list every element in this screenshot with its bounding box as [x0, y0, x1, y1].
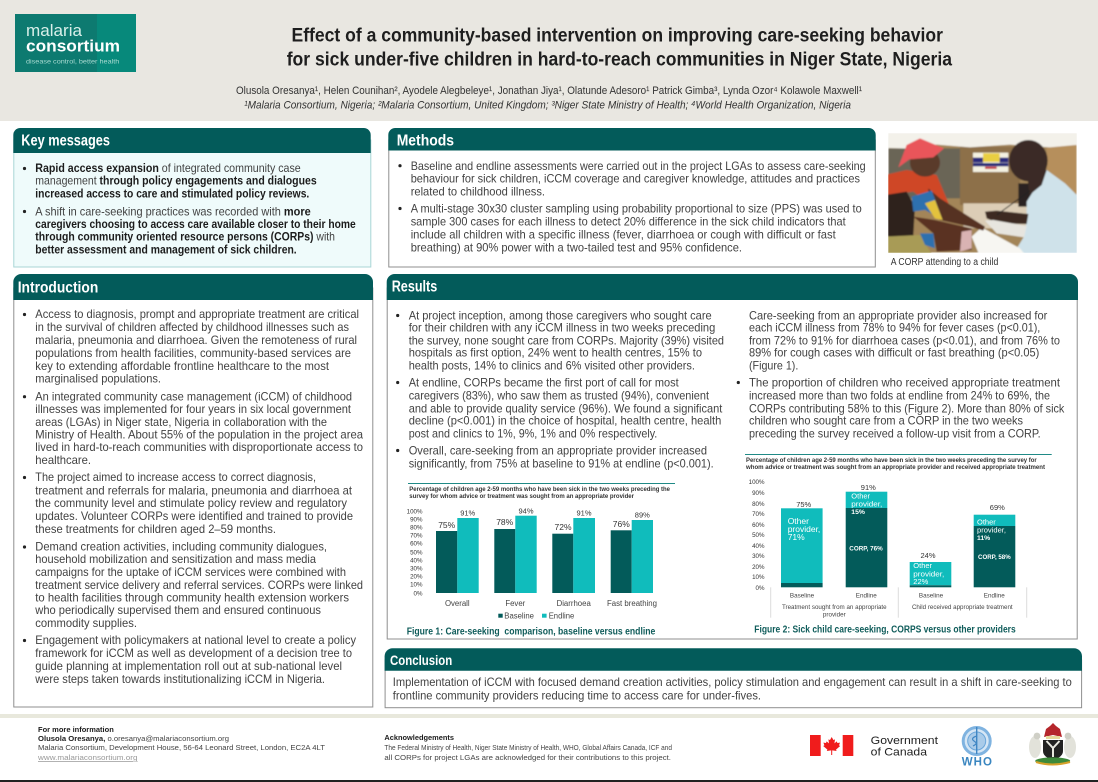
- introduction bullet 1: populations from health facilities, community-based services are: [35, 346, 351, 360]
- footer: contact information: [37, 725, 325, 762]
- introduction bullet 4: commodity supplies.: [35, 616, 137, 630]
- figure 2 category labels: Endline: [856, 592, 877, 599]
- results bullet 3 continued: (Figure 1).: [749, 358, 798, 372]
- figure 2 total labels: 75%: [796, 500, 812, 509]
- introduction bullet 1: [23, 307, 359, 386]
- figure 2 category labels: Child received appropriate treatment: [912, 604, 1013, 611]
- figure 2 segment labels: Other: [913, 561, 933, 570]
- figure 1 value labels: 94%: [518, 506, 534, 515]
- results bullet 1: At project inception, among those caregivers who sought care: [409, 308, 712, 322]
- key message 2: better assessment and management of sick children.: [35, 242, 297, 256]
- introduction bullet 2: lived in hard-to-reach communities with disproportionate access to: [35, 440, 363, 454]
- introduction bullet 3: The project aimed to increase access to correct diagnosis,: [35, 470, 316, 484]
- results bullet 3: Overall, care-seeking from an appropriate provider increased: [409, 443, 707, 457]
- introduction bullet 3: updates. Volunteer CORPs were identified and trained to provide: [35, 509, 353, 523]
- results bullet 4: increased more than two folds at endline from 24% to 69%, the: [749, 388, 1050, 402]
- figure 2 category labels: provider: [823, 611, 846, 618]
- introduction bullet 4: to health facilities through community health extension workers: [35, 590, 349, 604]
- heading: methods: Methods: [397, 133, 454, 150]
- introduction bullet 2: illnesses was implemented for four years in six local government: [35, 402, 352, 416]
- results bullet 2: [396, 375, 723, 440]
- introduction bullet 5: were steps taken towards institutionalizing iCCM in Nigeria.: [34, 672, 325, 686]
- logo: malaria consortium: consortium: [26, 37, 120, 56]
- figure 1 y axis: 40%: [410, 558, 423, 565]
- panel: conclusion: [385, 648, 1082, 708]
- introduction bullet 4: household mobilization and sensitization and mass media: [35, 552, 316, 566]
- footer: [0, 714, 1098, 782]
- icon: Canadian flag: [810, 735, 853, 756]
- figure 2 segment labels: provider,: [788, 524, 820, 534]
- results bullet 4: preceding the survey received a follow-up visit from a CORP.: [749, 426, 1041, 440]
- figure 2 segment labels: provider,: [913, 569, 944, 578]
- introduction bullet 3: the community level and stimulate policy review and regulatory: [35, 496, 347, 510]
- authors and affiliations: Olusola Oresanya¹, Helen Counihan², Ayodele Alegbeleye¹, Jonathan Jiya¹, Olatunde Adesoro¹ Patrick Gimba³, Lynda Ozor⁴ Kolawole Maxwell¹: [236, 85, 862, 97]
- results bullet 1: the survey, none sought care from CORPs. Majority (39%) visited: [409, 333, 724, 347]
- title: [287, 25, 952, 71]
- footer: acknowledgements: all CORPs for project LGAs are acknowledged for their contributions to this project.: [384, 753, 671, 762]
- figure 2 category labels: [771, 587, 1027, 618]
- results bullet 2: caregivers (83%), who saw them as trusted (94%), convenient: [409, 388, 710, 402]
- figure 2: provider stacked bar chart: [745, 454, 1052, 636]
- footer: contact information: www.malariaconsortium.org: [37, 753, 138, 762]
- panel: introduction: [13, 274, 373, 707]
- methods bullet 2: [398, 202, 862, 254]
- conclusion text: frontline community providers reducing time to access care for under-fives.: [393, 689, 761, 703]
- results bullet 1: health posts, 14% to clinics and 6% visited other providers.: [409, 358, 695, 372]
- methods bullet 1: related to childhood illness.: [411, 184, 545, 198]
- footer: contact information: Olusola Oresanya, o.oresanya@malariaconsortium.org: [38, 734, 229, 743]
- methods bullet 2: sample 300 cases for each illness to detect 20% difference in the sick child indicators that: [411, 214, 846, 228]
- footer: acknowledgements: [384, 733, 672, 762]
- figure 2 segment labels: provider,: [851, 499, 882, 508]
- introduction bullet 3: these treatments for children aged 2–59 months.: [35, 522, 276, 536]
- figure 2 y axis: 0%: [756, 585, 765, 592]
- figure 2 category labels: Treatment sought from an appropriate: [782, 604, 887, 611]
- figure 1 subtitle: Percentage of children age 2-59 months who have been sick in the two weeks preceding the: [409, 486, 671, 493]
- figure 2 total labels: 91%: [861, 483, 876, 492]
- results bullet 1: for their children with any iCCM illness in two weeks preceding: [409, 320, 715, 334]
- figure 1 subtitle: survey for whom advice or treatment was sought from an appropriate provider: [409, 493, 635, 500]
- figure 2 category labels: Endline: [984, 592, 1005, 599]
- figure 1 y axis: 90%: [410, 517, 423, 524]
- results bullet 3 continued: [749, 308, 1060, 372]
- figure 1 value labels: 89%: [635, 510, 650, 519]
- introduction bullet 1: Access to diagnosis, prompt and appropriate treatment are critical: [35, 307, 359, 321]
- figure 2 y axis: 10%: [752, 574, 765, 581]
- introduction bullet 5: framework for iCCM as well as development of a decision tree to: [35, 646, 352, 660]
- introduction bullet 1: in the survival of children affected by childhood illnesses such as: [35, 320, 349, 334]
- key message 2: caregivers choosing to access care available closer to their home: [35, 217, 356, 231]
- figure 1 y axis: 0%: [414, 590, 423, 598]
- results bullet 4: CORPs contributing 58% to this (Figure 2). More than 80% of sick: [749, 401, 1065, 415]
- authors and affiliations: [236, 85, 862, 112]
- footer: acknowledgements: Acknowledgements: [384, 733, 454, 742]
- figure 1 y axis: 60%: [410, 541, 423, 548]
- figure 2 segment labels: 11%: [977, 535, 990, 542]
- key message 2: A shift in care-seeking practices was recorded with more: [35, 204, 311, 218]
- figure 2 segment labels: provider,: [977, 527, 1006, 534]
- figure 1 value labels: 76%: [613, 519, 630, 529]
- figure 1 value labels: 75%: [438, 520, 456, 530]
- logo: WHO: WHO: [962, 756, 992, 768]
- results bullet 3 continued: 89% for cough cases with difficult or fast breathing (p<0.05): [749, 345, 1039, 359]
- figure 2 y axis: 60%: [752, 522, 765, 529]
- figure 1 y axis: 70%: [410, 533, 423, 540]
- figure 1 caption: Figure 1: Care-seeking comparison, baseline versus endline: [407, 627, 656, 638]
- figure 2 caption: Figure 2: Sick child care-seeking, CORPS versus other providers: [754, 625, 1016, 636]
- logo text: Government of Canada: Government: [871, 735, 939, 747]
- key message 1: [23, 161, 317, 200]
- figure 2 segment labels: 71%: [788, 532, 805, 542]
- introduction bullet 2: healthcare.: [35, 453, 91, 467]
- figure 2 y axis: 100%: [749, 479, 765, 486]
- methods bullet 2: include all children with a specific illness (fever, diarrhoea or cough with difficult or fast: [411, 228, 836, 242]
- heading: key messages: Key messages: [21, 133, 110, 150]
- figure 2 y axis: 40%: [752, 543, 765, 550]
- results bullet 4: children who sought care from a CORP in the two weeks: [749, 413, 1023, 427]
- photo: a CORP attending to a child: [885, 130, 1080, 268]
- figure 2 segment labels: 22%: [913, 577, 929, 586]
- introduction bullet 5: [23, 633, 356, 686]
- photo caption: A CORP attending to a child: [891, 257, 998, 268]
- heading: conclusion: Conclusion: [390, 652, 452, 668]
- figure 2 subtitle: Percentage of children age 2-59 months who have been sick in the two weeks preceding the survey for: [746, 457, 1037, 464]
- figure 1 y axis: 10%: [410, 582, 423, 589]
- figure 1 bars: [436, 516, 653, 593]
- results bullet 2: and able to provide quality service (96%). We found a significant: [409, 401, 723, 415]
- authors and affiliations: ¹Malaria Consortium, Nigeria; ²Malaria Consortium, United Kingdom; ³Niger State Ministry of Health; ⁴World Health Organization, Nigeria: [244, 100, 851, 112]
- figure 1 legend: Baseline: [504, 612, 534, 621]
- methods bullet 2: A multi-stage 30x30 cluster sampling using probability proportional to size (PPS) was used to: [411, 202, 862, 216]
- results bullet 2: post and clinics to 1%, 9%, 1% and 0% respectively.: [409, 426, 657, 440]
- figure 1 y axis: 50%: [410, 550, 423, 557]
- results bullet 1: [396, 308, 724, 372]
- introduction bullet 4: who periodically supervised them and ensured continuous: [34, 603, 321, 617]
- introduction bullet 1: malaria, pneumonia and diarrhoea. Given the remoteness of rural: [35, 333, 357, 347]
- introduction bullet 2: Ministry of Health. About 55% of the population in the project area: [35, 428, 363, 442]
- logo text: Government of Canada: of Canada: [871, 747, 928, 759]
- figure 1 y axis: 30%: [410, 566, 423, 573]
- figure 1 legend: Endline: [549, 612, 574, 621]
- logo: malaria consortium: malaria: [26, 22, 83, 40]
- key message 1: management through policy engagements and dialogues: [35, 174, 317, 188]
- figure 2 y axis: 50%: [752, 532, 765, 539]
- introduction bullet 2: areas (LGAs) in Niger state, Nigeria in collaboration with the: [35, 415, 327, 429]
- methods bullet 1: behaviour for sick children, iCCM coverage and caregiver knowledge, attitudes and practices: [411, 172, 860, 186]
- header band: [0, 0, 1098, 121]
- figure 1 category labels: Overall: [445, 599, 470, 608]
- figure 2 total labels: 24%: [920, 551, 936, 560]
- panel: results: [387, 274, 1078, 639]
- logo: malaria consortium: [15, 14, 136, 72]
- figure 1 value labels: 78%: [496, 517, 514, 527]
- panel: key messages: [13, 128, 371, 267]
- figure 2 subtitle: [745, 457, 1045, 471]
- figure 2 y axis: 90%: [752, 490, 765, 497]
- introduction bullet 4: Demand creation activities, including community dialogues,: [35, 540, 327, 554]
- footer: contact information: For more information: [38, 725, 114, 734]
- figure 2 y axis: 70%: [752, 511, 765, 518]
- introduction bullet 5: guide planning at implementation roll out at sub-national level: [35, 659, 342, 673]
- figure 2 category labels: Baseline: [919, 592, 944, 599]
- title: for sick under-five children in hard-to-reach communities in Niger State, Nigeria: [287, 49, 952, 71]
- figure 1 y axis: [407, 508, 423, 598]
- footer: contact information: Malaria Consortium, Development House, 56-64 Leonard Street, London, EC2A 4LT: [38, 743, 325, 752]
- figure 1 subtitle: [409, 486, 671, 500]
- logo: WHO: [962, 727, 992, 768]
- figure 1 category labels: [445, 599, 657, 608]
- key message 1: increased access to care and stimulated policy reviews.: [35, 186, 309, 200]
- figure 2 category labels: Baseline: [790, 592, 815, 599]
- figure 1 y axis: 20%: [410, 574, 423, 581]
- introduction bullet 1: marginalised populations.: [35, 372, 161, 386]
- figure 2 segment labels: Other: [977, 517, 996, 526]
- introduction bullet 4: [23, 540, 363, 630]
- key message 2: through community oriented resource persons (CORPs) with: [35, 230, 335, 244]
- figure 2 segment labels: Other: [788, 516, 809, 526]
- methods bullet 2: breathing) at 90% power with a two-tailed test and 95% confidence.: [411, 240, 742, 254]
- conclusion text: [393, 675, 1072, 703]
- results bullet 3 continued: each iCCM illness from 78% to 94% for fever cases (p<0.01),: [749, 320, 1040, 334]
- figure 2 total labels: 69%: [990, 503, 1005, 512]
- results bullet 1: hospitals as first option, 24% went to health centres, 15% to: [409, 345, 702, 359]
- results bullet 3 continued: from 72% to 91% for diarrhoea cases (p<0.01), and from 76% to: [749, 333, 1060, 347]
- footer: acknowledgements: The Federal Ministry of Health, Niger State Ministry of Health, WHO, Global Affairs Canada, ICF and: [384, 743, 672, 752]
- results bullet 3 continued: Care-seeking from an appropriate provider also increased for: [749, 308, 1047, 322]
- methods bullet 1: [398, 159, 866, 198]
- figure 2 y axis: 80%: [752, 501, 765, 508]
- logo text: Government of Canada: [871, 735, 939, 759]
- figure 2 y axis: [749, 479, 765, 592]
- introduction bullet 5: Engagement with policymakers at national level to create a policy: [35, 633, 356, 647]
- results bullet 4: The proportion of children who received appropriate treatment: [749, 375, 1061, 389]
- logo: Nigerian coat of arms: [1029, 723, 1076, 765]
- figure 1 category labels: Diarrhoea: [557, 599, 591, 608]
- figure 1 value labels: 72%: [554, 522, 572, 532]
- heading: results: Results: [392, 279, 437, 296]
- panel: methods: [388, 128, 876, 267]
- figure 1 y axis: 80%: [410, 525, 423, 532]
- results bullet 3: [396, 443, 714, 470]
- introduction bullet 3: [23, 470, 353, 536]
- key message 1: Rapid access expansion of integrated community case: [35, 161, 301, 175]
- figure 1 legend: [498, 612, 574, 621]
- logo: malaria consortium: disease control, better health: [26, 58, 120, 66]
- introduction bullet 2: [23, 390, 363, 467]
- figure 2 y axis: 20%: [752, 564, 765, 571]
- key message 2: [23, 204, 356, 256]
- figure 1 value labels: 91%: [460, 508, 476, 517]
- title: Effect of a community-based intervention on improving care-seeking behavior: [292, 25, 943, 47]
- introduction bullet 4: treatment service delivery and referral services. CORPs were linked: [35, 578, 363, 592]
- introduction bullet 2: An integrated community case management (iCCM) of childhood: [35, 390, 352, 404]
- introduction bullet 1: key to extending affordable frontline healthcare to the most: [35, 359, 330, 373]
- figure 1 y axis: 100%: [407, 508, 423, 516]
- figure 2 bars: [781, 492, 1015, 587]
- figure 2 y axis: 30%: [752, 553, 765, 560]
- results bullet 2: decline (p<0.001) in the choice of hospital, health centre, health: [409, 413, 721, 427]
- results bullet 3: significantly, from 75% at baseline to 91% at endline (p<0.001).: [409, 456, 714, 470]
- figure 1 category labels: Fast breathing: [607, 599, 657, 608]
- results bullet 2: At endline, CORPs became the first port of call for most: [409, 375, 679, 389]
- figure 2 segment labels: CORP, 76%: [849, 545, 883, 552]
- figure 2 segment labels: CORP, 58%: [978, 554, 1011, 561]
- figure 2 total labels: [796, 483, 1005, 560]
- figure 2 subtitle: whom advice or treatment was sought from an appropriate provider and received appropriate treatment: [745, 464, 1045, 471]
- results bullet 4: [737, 375, 1065, 440]
- heading: introduction: Introduction: [18, 280, 98, 297]
- figure 2 segment labels: 15%: [851, 509, 865, 516]
- figure 2 segment labels: Other: [851, 491, 871, 500]
- methods bullet 1: Baseline and endline assessments were carried out in the project LGAs to assess care-seeking: [411, 159, 866, 173]
- figure 1 value labels: [438, 506, 650, 532]
- introduction bullet 3: treatment and referrals for malaria, pneumonia and diarrhoea at: [35, 484, 353, 498]
- figure 2 segment labels: [788, 491, 1011, 586]
- figure 1 category labels: Fever: [505, 599, 526, 608]
- introduction bullet 4: campaigns for the uptake of iCCM services were combined with: [35, 565, 346, 579]
- figure 1: care-seeking bar chart: [407, 484, 675, 638]
- figure 1 value labels: 91%: [576, 508, 592, 517]
